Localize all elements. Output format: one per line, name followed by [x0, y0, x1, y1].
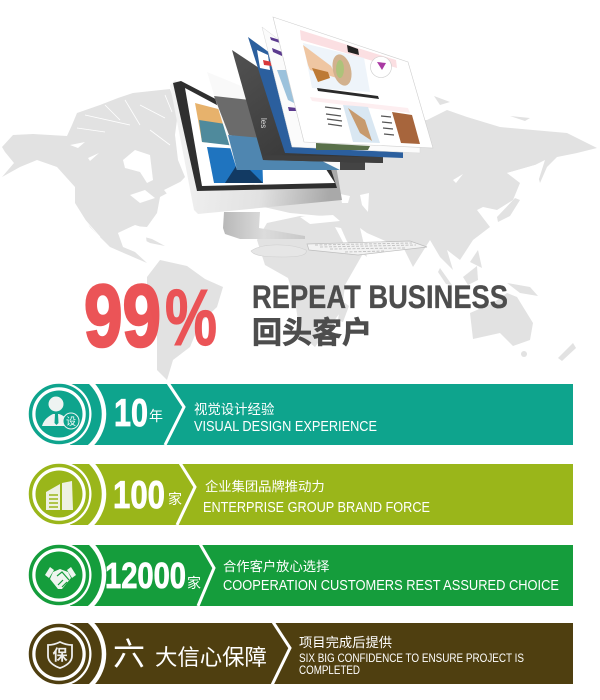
banner 2: enterprise group brand force: [16, 450, 573, 538]
headline: 99%: 99: [84, 266, 161, 365]
banner 1 icon: 设: [66, 416, 76, 428]
banner 4 english label: [299, 651, 524, 677]
map: Eurasia: [240, 110, 597, 270]
banner 1: visual design experience: [16, 370, 573, 458]
banner 4 english label: COMPLETED: [299, 663, 360, 677]
banner 1 number: 10: [114, 392, 148, 435]
web page 2: les: [259, 118, 268, 128]
monitor and stacked web pages: [170, 17, 433, 257]
map: Africa: [257, 216, 365, 347]
map: North America: [2, 89, 185, 263]
banner 1 chevron: [165, 383, 184, 445]
monitor bezel: [173, 81, 337, 191]
banner 4 english label: SIX BIG CONFIDENCE TO ENSURE PROJECT IS: [299, 651, 524, 665]
banner 3 english label: COOPERATION CUSTOMERS REST ASSURED CHOICE: [223, 578, 559, 594]
banner 1 icon: [30, 386, 88, 442]
banner 2 number: 100: [113, 474, 165, 517]
monitor body: [170, 80, 342, 214]
headline: 99%: %: [165, 273, 217, 362]
banner 4 chevron: [272, 622, 290, 685]
web page 1: [207, 72, 365, 170]
map: inland water: [70, 95, 545, 246]
web page 3: [248, 37, 403, 158]
banner 3 chevron: [198, 544, 214, 606]
web page 2: [232, 50, 383, 163]
headline: chinese subtitle: 回头客户: [252, 317, 372, 350]
web page 5: [273, 17, 433, 148]
banner 4 background: [70, 623, 573, 684]
world map background: [2, 89, 597, 380]
banner 2 unit: 家: [168, 491, 182, 507]
banner 1 background: [70, 384, 573, 445]
banner 3 icon: [30, 546, 88, 604]
headline: repeat business: REPEAT BUSINESS: [252, 279, 508, 315]
banner 2 english label: ENTERPRISE GROUP BRAND FORCE: [203, 500, 430, 516]
banner 4 heading: 大信心保障: [155, 645, 267, 670]
mouse: [251, 245, 306, 257]
banner 4 icon: [30, 626, 88, 682]
banner 1 unit: 年: [149, 408, 163, 424]
banner 1 chinese label: 视觉设计经验: [194, 402, 275, 417]
banner 4 chinese label: 项目完成后提供: [299, 635, 392, 650]
banner 4 numeral: 六: [113, 636, 145, 672]
web page 4: [262, 27, 420, 153]
banner 3: cooperation customers: [16, 531, 573, 619]
banner 1 english label: VISUAL DESIGN EXPERIENCE: [194, 419, 377, 435]
banner 2 chevron: [177, 463, 195, 525]
map: South America: [147, 260, 223, 380]
monitor stand: [223, 212, 305, 239]
banner 3 background: [70, 545, 573, 606]
banner 3 unit: 家: [187, 575, 201, 591]
banner 3 chinese label: 合作客户放心选择: [223, 558, 329, 574]
banner 4: six big confidence: [16, 610, 573, 698]
map: islands: [133, 96, 576, 361]
monitor screen: [185, 88, 335, 186]
banner 4 icon: 保: [52, 647, 68, 664]
map: Australia: [470, 293, 533, 346]
banner 3 number: 12000: [105, 555, 186, 596]
keyboard: [307, 241, 427, 255]
banner 2 icon: [30, 466, 88, 522]
banner 2 background: [70, 464, 573, 525]
banner 2 chinese label: 企业集团品牌推动力: [205, 478, 325, 494]
